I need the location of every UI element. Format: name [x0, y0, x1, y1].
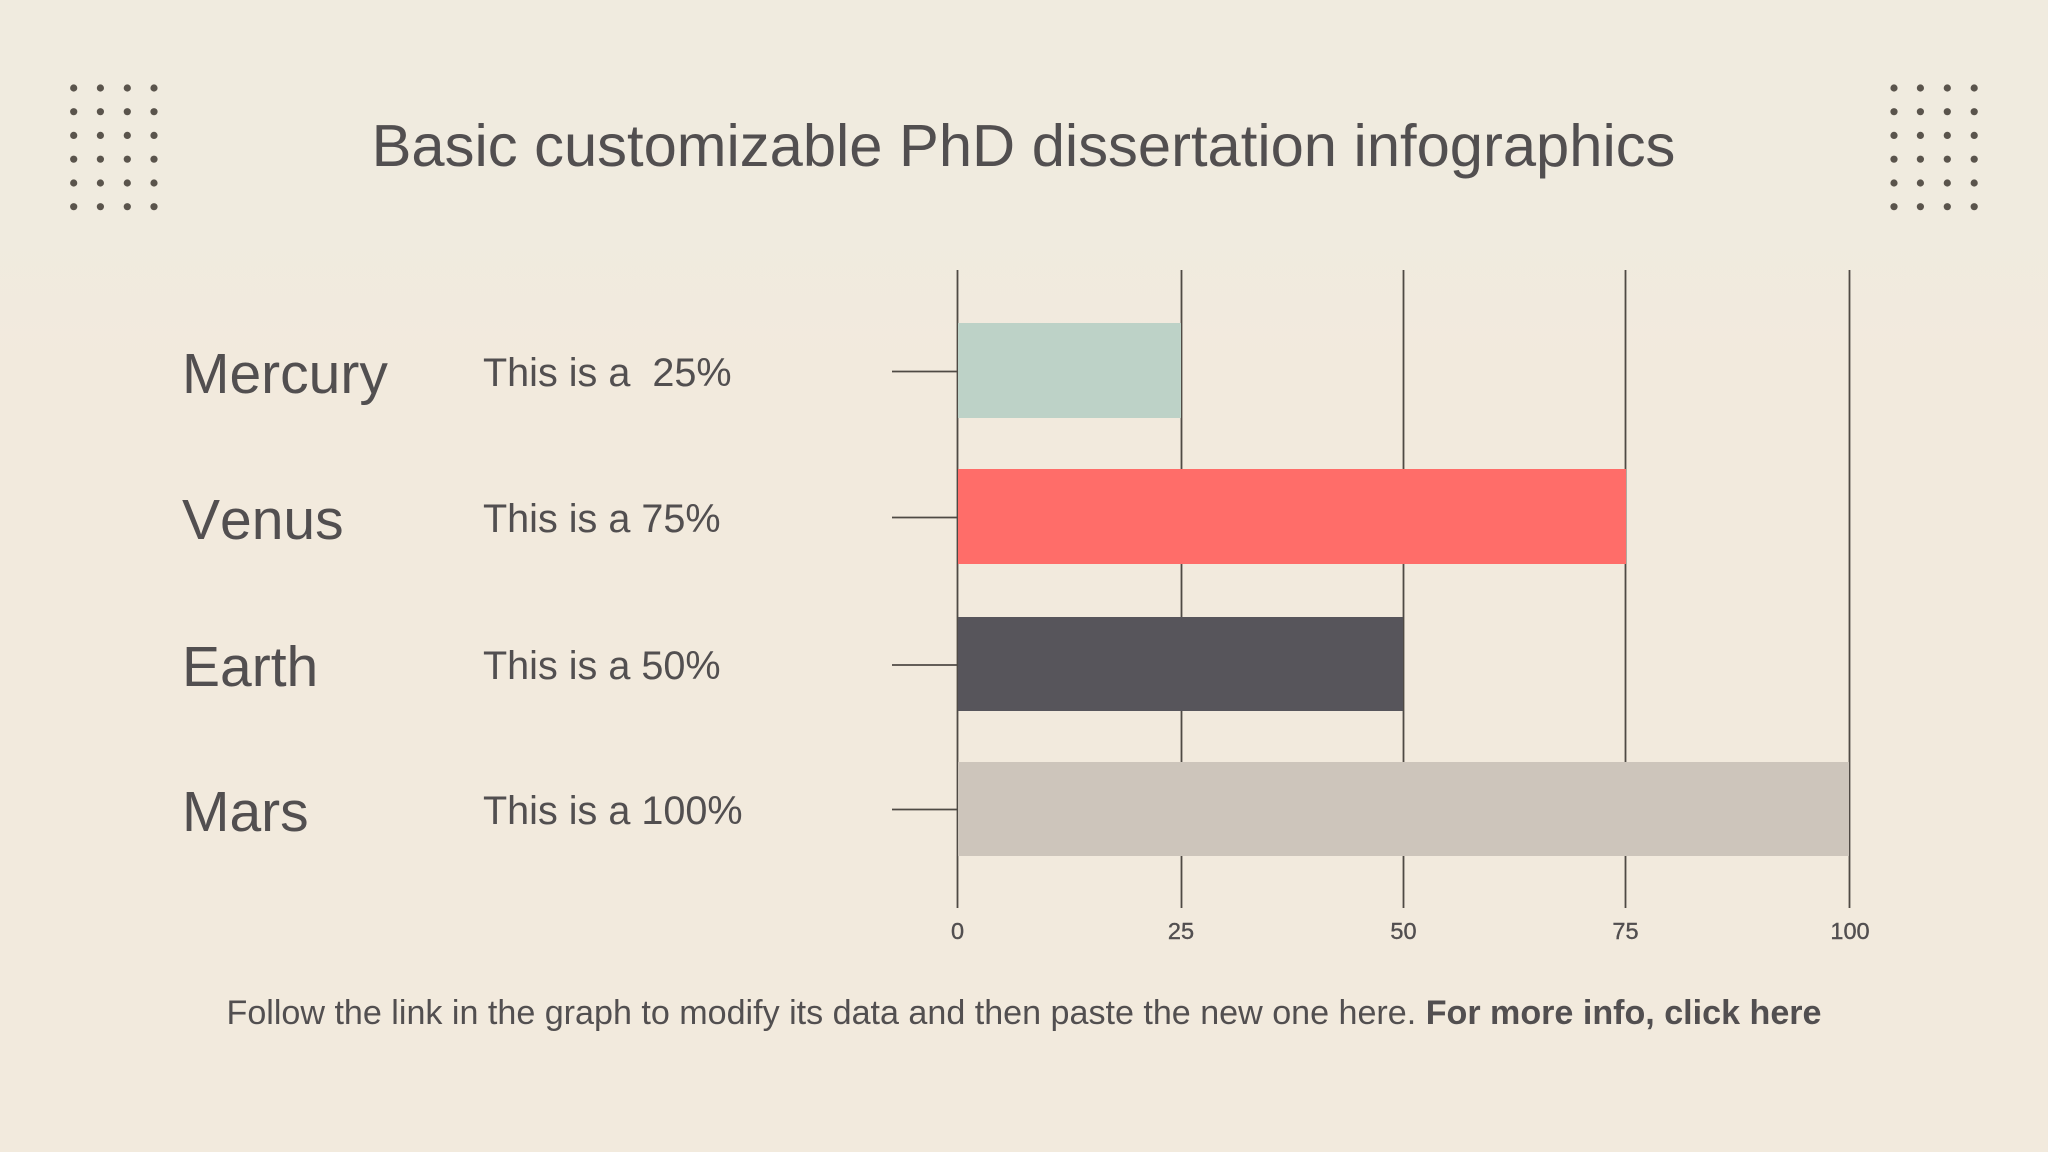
- bar: Venus 75: [958, 469, 1626, 564]
- axis labels: 100: [1830, 918, 1870, 944]
- label: Venus: Venus: [182, 488, 344, 552]
- axis labels: 25: [1168, 918, 1194, 944]
- description: Mercury: This is a 25%: [483, 351, 732, 395]
- dot grid: top left: [70, 84, 158, 210]
- label: Earth: Earth: [182, 635, 318, 699]
- axis labels: 75: [1612, 918, 1639, 944]
- axis labels: [951, 918, 1870, 944]
- row descriptions: [483, 351, 743, 833]
- row labels: [182, 342, 388, 844]
- axis labels: 0: [951, 918, 964, 944]
- title: Basic customizable PhD dissertation infographics: [372, 112, 1675, 179]
- label: Mercury: Mercury: [182, 342, 388, 406]
- bar: Mercury 25: [958, 323, 1181, 418]
- description: Earth: This is a 50%: [483, 644, 721, 688]
- axis labels: 50: [1390, 918, 1417, 944]
- label: Mars: Mars: [182, 780, 309, 844]
- dot grid: top right: [1890, 84, 1978, 210]
- bar: Earth 50: [958, 617, 1403, 711]
- bar chart: [892, 270, 1870, 944]
- chart grid lines: [958, 270, 1850, 908]
- description: Venus: This is a 75%: [483, 497, 721, 541]
- description: Mars: This is a 100%: [483, 789, 743, 833]
- footer note: Follow the link in the graph to modify its data and then paste the new one here. For more info, click here: [227, 994, 1821, 1032]
- category tick marks: [892, 372, 957, 810]
- bar: Mars 100: [958, 762, 1849, 856]
